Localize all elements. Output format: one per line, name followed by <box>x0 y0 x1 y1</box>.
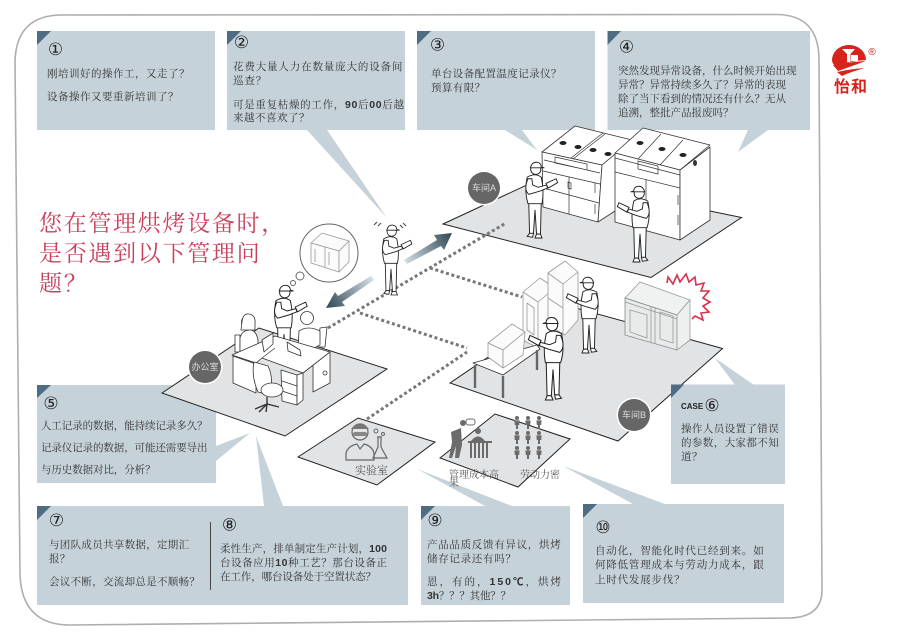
item 8: ⑧ <box>222 516 237 536</box>
item 7 <box>49 511 200 588</box>
callout 2: 可是重复枯燥的工作，90后00后越 <box>233 98 404 111</box>
floor: workshop B <box>450 305 722 441</box>
callout 4: 异常？异常持续多久了？异常的表现 <box>618 78 786 91</box>
floor: laboratory <box>298 418 435 485</box>
callout 1: 刚培训好的操作工，又走了？ <box>47 67 190 80</box>
caption: laboratory: 实验室 <box>355 463 388 477</box>
callout 6: 道？ <box>681 450 703 463</box>
callout 10: 上时代发展步伐？ <box>595 573 685 586</box>
arrow to office <box>326 276 374 308</box>
callout 6: 操作人员设置了错误 <box>681 422 779 435</box>
callout 9: 储存记录还有吗？ <box>427 552 517 565</box>
item 7: ⑦ <box>49 511 64 531</box>
thought bubble with cabinet <box>290 224 358 286</box>
callout 10 <box>563 466 784 603</box>
callout 4 <box>608 31 810 152</box>
callout 4: 突然发现异常设备，什么时候开始出现 <box>618 64 797 77</box>
divider <box>210 522 212 590</box>
circle label: office <box>188 350 222 384</box>
logo: 怡和 <box>834 78 868 96</box>
callout 9: 产品品质反馈有异议，烘烤 <box>427 538 561 551</box>
callout 9: 恩，有的，150℃，烘烤 <box>427 575 562 588</box>
callout 9: ⑨ <box>427 511 443 531</box>
caption: management cost: 果 <box>449 477 459 489</box>
caption: labour intensive: 劳动力密 <box>520 468 560 481</box>
patrol person with box <box>374 222 412 295</box>
caption: management cost: 管理成本高 <box>449 468 499 481</box>
item 8: 台设备应用10种工艺？那台设备正 <box>220 556 388 569</box>
icon: lab scientist <box>346 424 387 460</box>
caption: management cost <box>449 468 499 489</box>
transparent faulty cabinet <box>625 282 690 350</box>
title: 是否遇到以下管理问 <box>39 241 261 266</box>
callout 6 <box>671 358 785 484</box>
person: workshop A operator 2 <box>617 186 649 262</box>
circle label: workshop B <box>616 398 652 432</box>
callout 2 <box>227 31 405 218</box>
callout 5 <box>37 385 250 483</box>
floor: office <box>162 328 387 436</box>
icon: management cost <box>449 419 492 458</box>
callout 3: 单台设备配置温度记录仪？ <box>431 67 562 80</box>
person: workshop A operator 1 <box>526 162 558 238</box>
logo <box>832 45 876 96</box>
office desks <box>232 333 330 405</box>
cabinet: workshop A left <box>542 126 632 222</box>
cabinet: workshop A right <box>615 128 710 240</box>
callout 1: 设备操作又要重新培训了？ <box>47 90 179 103</box>
callout 5: 记录仪记录的数据，可能还需要导出 <box>41 441 207 454</box>
callout 2: 巡查？ <box>233 74 267 87</box>
floor: cost and labour <box>440 414 570 487</box>
floor: workshop A <box>443 177 742 278</box>
red alert burst <box>667 274 710 320</box>
callout 2: ② <box>234 33 249 53</box>
callout 10: ⑩ <box>595 518 611 538</box>
callout 1 <box>37 31 215 130</box>
circle label: workshop A: 车间A <box>472 182 496 193</box>
item 7: 会议不断，交流却总是不顺畅？ <box>49 575 200 588</box>
title: 题？ <box>39 271 88 296</box>
callout 3 <box>417 31 595 150</box>
callout 5: 人工记录的数据，能持续记录多久？ <box>41 419 207 432</box>
item 8: 在工作，哪台设备处于空置状态？ <box>220 570 376 583</box>
item 8 <box>220 516 388 583</box>
title: 您在管理烘烤设备时， <box>39 211 286 237</box>
callout 3: ③ <box>430 36 445 56</box>
table with oven <box>473 324 540 398</box>
callout 10: 自动化，智能化时代已经到来。如 <box>595 544 764 557</box>
callout 10: 何降低管理成本与劳动力成本，跟 <box>595 558 764 571</box>
item 8: 柔性生产，排单制定生产计划，100 <box>220 542 387 555</box>
callout 5: 与历史数据对比，分析？ <box>41 463 155 476</box>
callout 9: 3h？？？其他？？ <box>427 589 511 602</box>
person: workshop B operator 2 <box>528 317 563 400</box>
arrow to workshop <box>404 233 452 264</box>
person: workshop B operator 1 <box>566 277 598 353</box>
callout 4: 除了当下看到的情况还有什么？无从 <box>618 92 786 105</box>
office people <box>235 285 327 363</box>
title <box>39 211 286 296</box>
logo: ® <box>868 47 876 58</box>
callout 7 and 8 <box>37 436 408 605</box>
callout 2: 来越不喜欢了？ <box>233 111 310 124</box>
cabinets: workshop B <box>523 261 578 348</box>
circle label: office: 办公室 <box>191 361 219 372</box>
callout 4: 追溯，整批产品报废吗？ <box>618 106 734 119</box>
callout 4: ④ <box>619 38 634 58</box>
callout 9 <box>417 469 570 605</box>
callout 2: 花费大量人力在数量庞大的设备间 <box>233 60 403 73</box>
callout 1: ① <box>48 40 63 60</box>
callout 3: 预算有限？ <box>431 81 486 94</box>
circle label: workshop A <box>466 170 502 206</box>
item 7: 与团队成员共享数据，定期汇 <box>49 538 190 551</box>
dotted connection lines <box>328 223 522 419</box>
item 7: 报？ <box>49 552 71 565</box>
callout 6: CASE <box>681 402 704 411</box>
callout 6: ⑥ <box>704 396 720 416</box>
callout 6: 的参数，大家都不知 <box>681 436 779 449</box>
callout 5: ⑤ <box>43 394 59 414</box>
circle label: workshop B: 车间B <box>622 409 646 420</box>
office chair <box>253 362 283 412</box>
icon: labour-intensive people grid <box>514 416 542 459</box>
